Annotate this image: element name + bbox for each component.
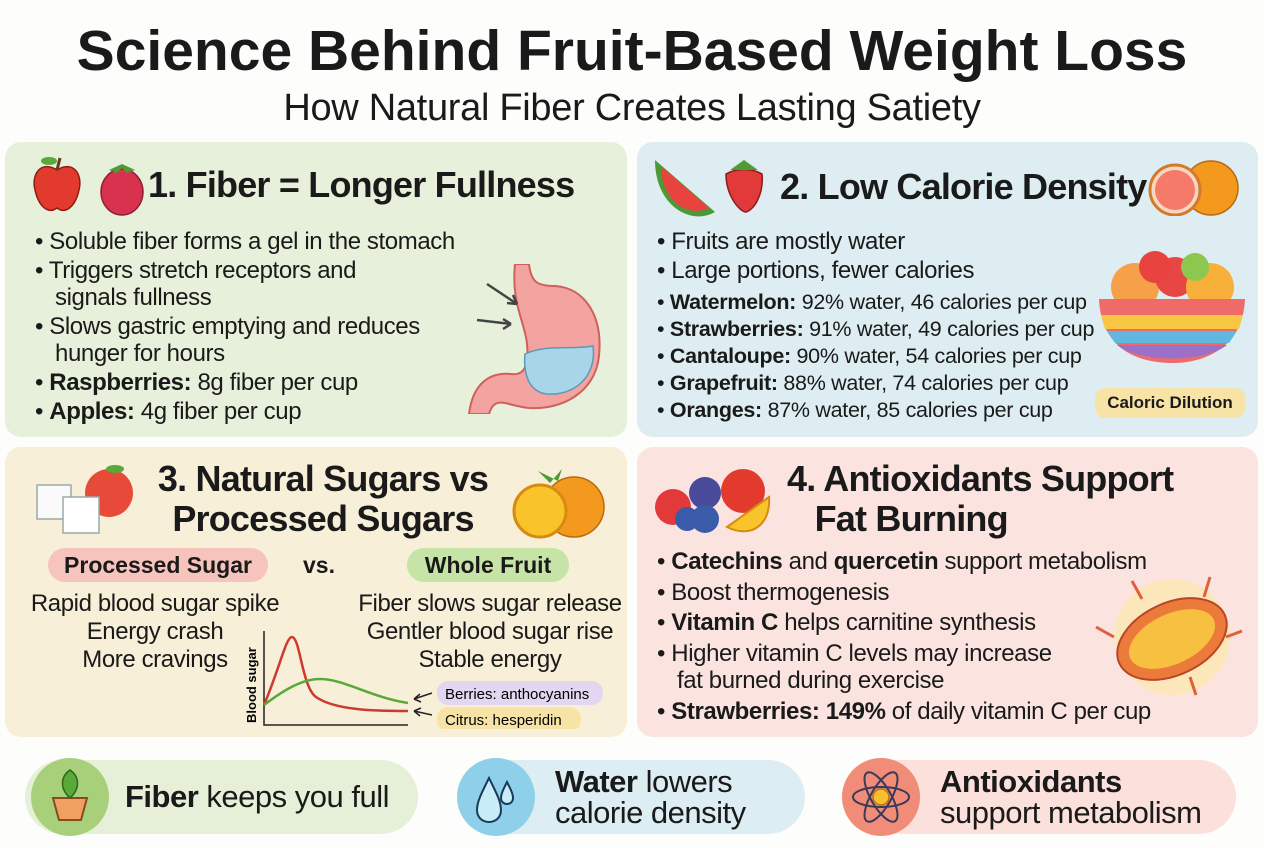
heading: 3. Natural Sugars vs: [158, 458, 488, 499]
panel: calorie density: • Large portions, fewer calories: [657, 257, 974, 284]
text: [940, 764, 1202, 830]
chart: blood sugar curves: Blood sugar: [244, 647, 259, 723]
panel: calorie density: [637, 142, 1258, 437]
panel: antioxidants: fat burned during exercise: [677, 667, 944, 694]
vs: vs.: [303, 552, 335, 578]
panel: calorie density: • Watermelon: 92% water, 46 calories per cup: [657, 290, 1087, 314]
chart: blood sugar curves: Citrus: hesperidin: [445, 712, 562, 729]
text: processed effects: Energy crash: [87, 618, 223, 645]
panel: calorie density: • Oranges: 87% water, 85 calories per cup: [657, 398, 1053, 422]
icon: mixed fruits: [655, 469, 770, 533]
heading: 4. Antioxidants Support: [787, 458, 1173, 499]
title: Science Behind Fruit-Based Weight Loss: [77, 19, 1187, 83]
icon: sugar cubes and apple: [36, 465, 133, 534]
heading: [787, 458, 1174, 539]
callout: caloric dilution: [1095, 388, 1245, 418]
heading: 1. Fiber = Longer Fullness: [148, 164, 574, 205]
text: [555, 764, 746, 830]
panel: fiber: • Triggers stretch receptors and: [35, 257, 356, 284]
text: fruit effects: Gentler blood sugar rise: [367, 618, 613, 645]
pill: processed sugar: [48, 548, 268, 582]
text: Antioxidants: [940, 764, 1122, 799]
icon: stomach: [468, 264, 601, 414]
text: processed effects: Rapid blood sugar spike: [31, 590, 279, 617]
panel: antioxidants: • Vitamin C helps carnitine synthesis: [657, 609, 1036, 636]
heading: 2. Low Calorie Density: [780, 166, 1146, 207]
callout: fiber: [25, 760, 418, 834]
pill: processed sugar: Processed Sugar: [64, 552, 252, 578]
text: Water lowers: [555, 764, 732, 799]
heading: Processed Sugars: [172, 498, 474, 539]
callout: caloric dilution: Caloric Dilution: [1107, 393, 1233, 412]
icon: fruit bowl: [1099, 251, 1245, 363]
text: support metabolism: [940, 795, 1202, 830]
icon: mitochondrion: [1095, 576, 1242, 696]
text: processed effects: More cravings: [82, 646, 228, 673]
chart: blood sugar curves: Berries: anthocyanins: [445, 686, 589, 703]
panel: calorie density: • Cantaloupe: 90% water, 54 calories per cup: [657, 344, 1082, 368]
icon: watermelon: [655, 160, 715, 216]
panel: antioxidants: • Higher vitamin C levels may increase: [657, 640, 1052, 667]
bullets: • Catechins and quercetin support metabolism: [657, 548, 1147, 575]
panel: fiber: • Apples: 4g fiber per cup: [35, 398, 301, 425]
icon: apple: [33, 157, 81, 212]
callout: water: [457, 760, 805, 834]
icon: raspberry: [100, 164, 144, 216]
subtitle: How Natural Fiber Creates Lasting Satiety: [283, 87, 981, 129]
text: fruit effects: Fiber slows sugar release: [358, 590, 622, 617]
panel: fiber: • Raspberries: 8g fiber per cup: [35, 369, 358, 396]
panel: calorie density: • Strawberries: 91% water, 49 calories per cup: [657, 317, 1094, 341]
heading: [158, 458, 488, 539]
text: calorie density: [555, 795, 746, 830]
panel: fiber: signals fullness: [55, 284, 211, 311]
callout: antioxidants: [842, 760, 1236, 834]
pill: whole fruit: Whole Fruit: [425, 552, 551, 578]
pill: whole fruit: [407, 548, 569, 582]
text: fruit effects: [358, 590, 622, 673]
icon: oranges: [512, 469, 605, 538]
panel: fiber: • Slows gastric emptying and reduces: [35, 313, 420, 340]
panel: antioxidants: • Boost thermogenesis: [657, 579, 889, 606]
heading: Fat Burning: [815, 498, 1008, 539]
text: processed effects: [31, 590, 279, 673]
icon: plant pot: [31, 758, 109, 836]
bullets: • Fruits are mostly water: [657, 228, 905, 255]
text: fruit effects: Stable energy: [419, 646, 561, 673]
icon: citrus: [1148, 160, 1239, 216]
icon: atom: [842, 758, 920, 836]
text: Fiber keeps you full: [125, 779, 389, 814]
panel: fiber: [5, 142, 627, 437]
panel: sugars: [5, 447, 627, 737]
panel: antioxidants: [637, 447, 1258, 737]
panel: calorie density: • Grapefruit: 88% water, 74 calories per cup: [657, 371, 1068, 395]
icon: strawberry: [725, 160, 763, 213]
panel: antioxidants: • Strawberries: 149% of daily vitamin C per cup: [657, 698, 1151, 725]
icon: water drops: [457, 758, 535, 836]
bullets: • Soluble fiber forms a gel in the stomach: [35, 228, 455, 255]
panel: fiber: hunger for hours: [55, 340, 225, 367]
chart: blood sugar curves: [244, 631, 603, 729]
